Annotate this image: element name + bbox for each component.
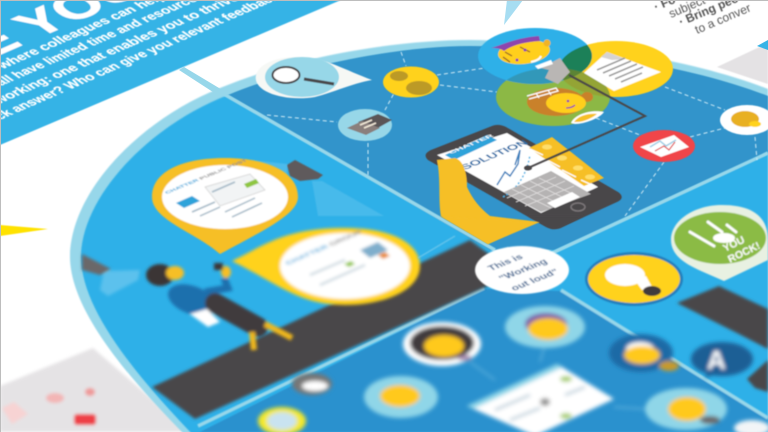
dark bar [152, 240, 500, 419]
phone corner [528, 216, 584, 229]
avatar: grey icon [292, 373, 332, 395]
green colleague circle [496, 68, 610, 126]
blue person circle [478, 28, 592, 84]
marker: chatter public post [152, 158, 298, 254]
laptop [190, 309, 220, 327]
projector lower [82, 254, 140, 296]
overlap of all three [563, 68, 581, 80]
hair [146, 264, 174, 286]
avatar: dark blue circle [609, 334, 679, 372]
icon: magnifier marker [256, 57, 372, 98]
top-right bullet text [652, 0, 753, 37]
man's head [491, 36, 551, 67]
keyboard [504, 171, 591, 212]
dark right shape [677, 286, 768, 349]
callout: working out loud [475, 246, 569, 294]
badge text: YOU [721, 234, 747, 255]
panel: bottom dark blue area [198, 288, 768, 432]
hand icon [690, 222, 736, 246]
callout text: out loud" [509, 268, 562, 293]
document card [467, 364, 614, 432]
projector body [287, 160, 323, 181]
separator lines [222, 93, 768, 254]
top-right blue tab [757, 40, 768, 50]
speech highlight pieces [541, 58, 570, 84]
badge text: ROCK! [726, 240, 762, 266]
connector line from phone to venn [524, 75, 645, 170]
panel: top dark blue area [228, 46, 768, 250]
torso [164, 278, 220, 322]
group mock-up [310, 242, 390, 285]
header label: CHATTER [447, 134, 496, 155]
top-right bullet text: to a conver [693, 1, 753, 37]
projector body [82, 254, 111, 275]
avatar: dark circle [403, 322, 481, 366]
icon: white face circle [720, 105, 768, 135]
speech bubble letter A [691, 342, 753, 378]
public post mock-up [176, 174, 265, 217]
face [166, 266, 184, 280]
overlap blue and yellow [561, 44, 593, 73]
callout text: "Working [497, 258, 550, 283]
projector upper [250, 160, 384, 216]
bottom-left grey panel [0, 348, 190, 432]
icon: light bulb circle [585, 252, 683, 306]
hand and phone [221, 266, 231, 278]
icon: red chart circle [633, 130, 695, 162]
screen header [445, 135, 497, 160]
document [584, 52, 661, 91]
connector stripe to banner [179, 67, 224, 94]
callout text: This is [486, 253, 526, 273]
home button [571, 203, 585, 211]
venn: person, document, colleague [478, 28, 673, 126]
avatar: left circle [364, 376, 438, 418]
avatar: purple hair [505, 306, 585, 348]
blue connector lines [470, 345, 645, 409]
callout text [486, 253, 562, 293]
blue pointer sliver [504, 0, 523, 25]
marker: chatter group [232, 228, 420, 305]
dark right lower tab [747, 360, 768, 392]
pointer dot [524, 166, 532, 170]
overlap blue and green [507, 68, 564, 85]
solution label: SOLUTION [458, 139, 531, 171]
icon: yellow person circle [383, 66, 439, 98]
hand palm [437, 158, 540, 244]
woman's head [527, 88, 604, 124]
badge: you rock [671, 205, 768, 281]
arm [205, 278, 228, 292]
shoes [252, 324, 292, 350]
legs [215, 303, 258, 327]
light beams [312, 181, 384, 216]
speech bubble letter A: A [707, 345, 726, 375]
banner: intro panel [0, 0, 341, 145]
icon: building [338, 109, 392, 141]
hand fingers [529, 137, 604, 186]
solution chart [497, 150, 520, 185]
group heading: CHATTER GROUP [283, 229, 365, 266]
avatar: lower right circle [645, 388, 727, 430]
phone and hand [426, 125, 622, 244]
overlap green and yellow [564, 72, 610, 96]
yellow document circle [559, 41, 673, 97]
person with phone [146, 263, 292, 350]
dashed network lines [267, 52, 757, 216]
panel: left light blue area [81, 95, 768, 432]
avatar: corner white circle [734, 420, 768, 432]
hand bottom edge overlay [440, 216, 530, 244]
top-right grey panel corner [717, 43, 768, 84]
avatar: yellow ring [258, 407, 306, 432]
yellow pointer sliver [0, 225, 48, 236]
thin panel line [418, 236, 455, 258]
phone body [426, 125, 622, 229]
red blurred icons [2, 388, 96, 425]
phone screen [437, 133, 598, 213]
public post heading: CHATTER PUBLIC POST [164, 159, 249, 195]
bottom panel avatars [258, 306, 768, 432]
